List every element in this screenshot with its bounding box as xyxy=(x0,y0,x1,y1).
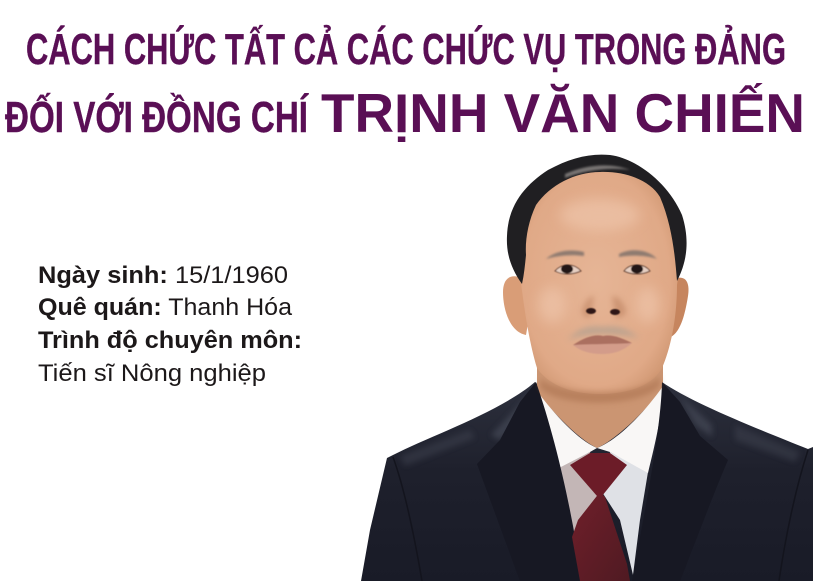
moustache xyxy=(568,326,639,340)
title name: TRỊNH VĂN CHIẾN xyxy=(321,82,805,144)
right ear xyxy=(663,278,689,338)
title xyxy=(5,24,805,144)
left collar xyxy=(537,391,597,469)
neck xyxy=(537,340,663,448)
hair xyxy=(507,155,687,284)
title line 2 lead-in: ĐỐI VỚI ĐỒNG CHÍ xyxy=(5,91,309,142)
nose shadow xyxy=(582,296,626,318)
left ear xyxy=(503,276,532,335)
portrait xyxy=(361,155,813,581)
shirt body right xyxy=(602,452,648,575)
tie blade xyxy=(572,492,630,581)
right lapel xyxy=(632,382,728,581)
left eyebrow xyxy=(546,250,584,259)
biography text xyxy=(38,262,302,387)
nostrils xyxy=(586,308,620,315)
face xyxy=(520,164,679,394)
sleeve seams xyxy=(393,450,808,581)
left lapel xyxy=(477,382,582,581)
shoulder highlights xyxy=(400,395,800,466)
right eye xyxy=(624,264,650,274)
right collar xyxy=(597,386,663,473)
birth date: Ngày sinh: 15/1/1960 xyxy=(38,262,288,289)
mouth xyxy=(573,335,632,354)
qualification value: Tiến sĩ Nông nghiệp xyxy=(38,360,266,387)
shirt xyxy=(537,386,663,581)
shirt body left xyxy=(555,452,600,581)
jaw shadow xyxy=(540,376,660,403)
right eyebrow xyxy=(619,250,657,259)
home town: Quê quán: Thanh Hóa xyxy=(38,294,293,321)
tie knot xyxy=(570,453,627,496)
left eye xyxy=(555,264,581,274)
tie xyxy=(570,453,630,581)
hair grey highlight xyxy=(565,165,630,178)
suit jacket xyxy=(361,382,813,581)
cheek highlights xyxy=(538,199,660,323)
qualification label: Trình độ chuyên môn: xyxy=(38,327,302,354)
